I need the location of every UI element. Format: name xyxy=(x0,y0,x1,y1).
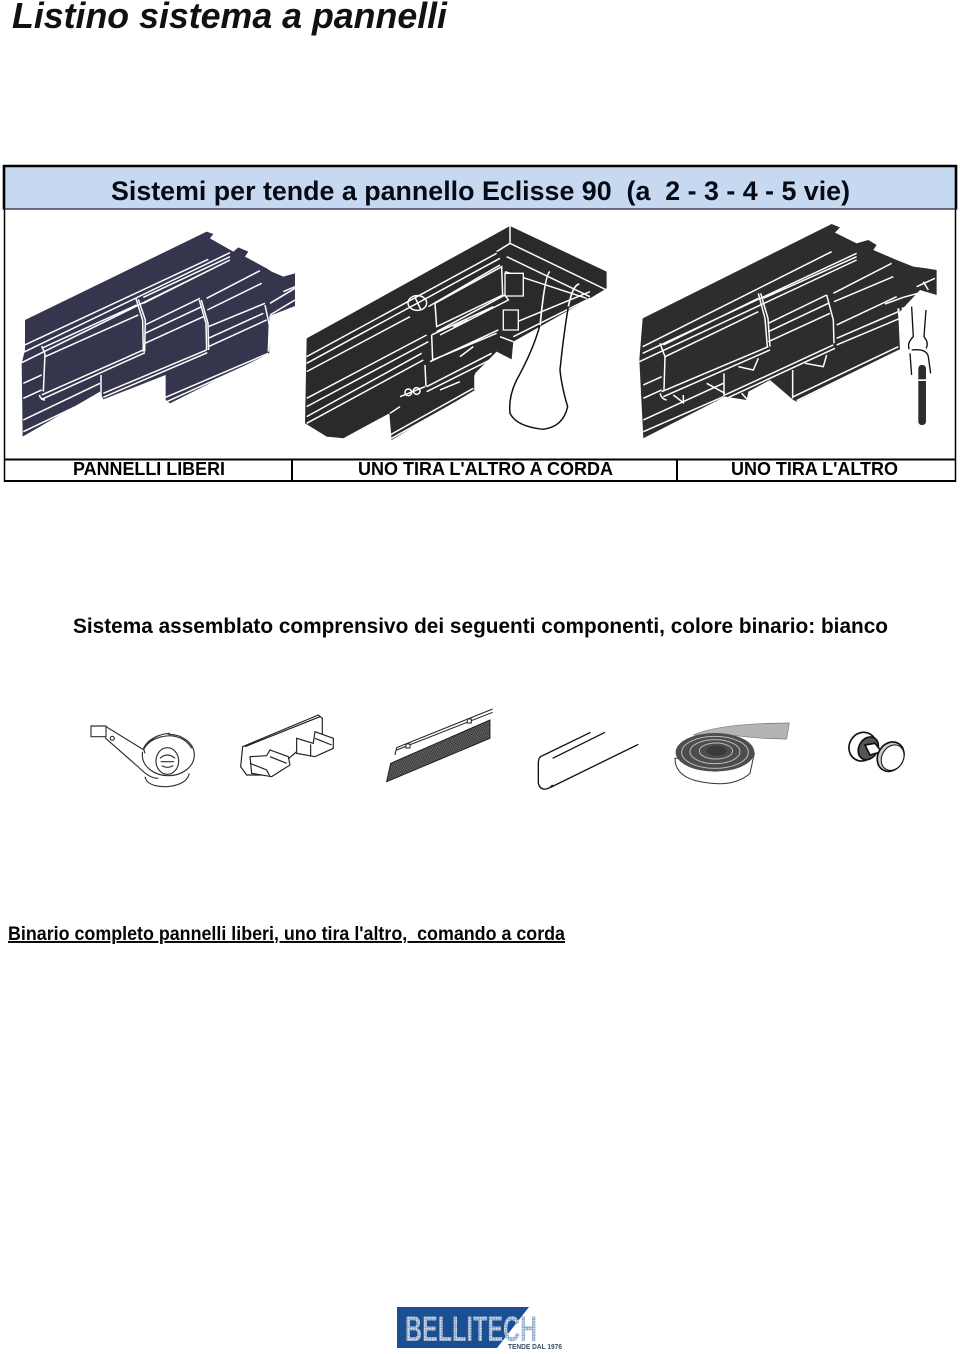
label: uno tira l'altro a corda: UNO TIRA L'ALTRO A CORDA xyxy=(358,459,613,479)
logo: Bellitech: TENDE DAL 1976 xyxy=(508,1344,562,1351)
logo: Bellitech xyxy=(397,1307,562,1351)
component: bar xyxy=(538,732,638,789)
component: tape roll xyxy=(675,723,789,784)
label: pannelli liberi: PANNELLI LIBERI xyxy=(73,459,225,479)
diagram: pannelli liberi rail xyxy=(22,232,295,437)
panel: product header band: Sistemi per tende a pannello Eclisse 90 (a 2 - 3 - 4 - 5 vie) xyxy=(111,176,850,206)
logo: Bellitech: BELLITECH xyxy=(405,1310,537,1349)
component: pulley xyxy=(91,726,194,787)
label: uno tira l'altro: UNO TIRA L'ALTRO xyxy=(731,459,898,479)
diagram: uno tira l'altro rail xyxy=(639,224,937,438)
component: end cap bracket xyxy=(241,715,333,777)
panel: product header band xyxy=(3,165,957,210)
diagram: uno tira l'altro a corda rail xyxy=(305,226,607,440)
component: knob xyxy=(844,727,909,776)
component: velcro strip with rail xyxy=(387,709,493,782)
panel frame: diagrams xyxy=(4,209,956,482)
text: complete rail note: Binario completo pannelli liberi, uno tira l'altro, comando a corda xyxy=(8,923,565,945)
option labels table xyxy=(4,459,956,482)
text: system description: Sistema assemblato comprensivo dei seguenti componenti, colore binario: bianco xyxy=(73,614,888,638)
